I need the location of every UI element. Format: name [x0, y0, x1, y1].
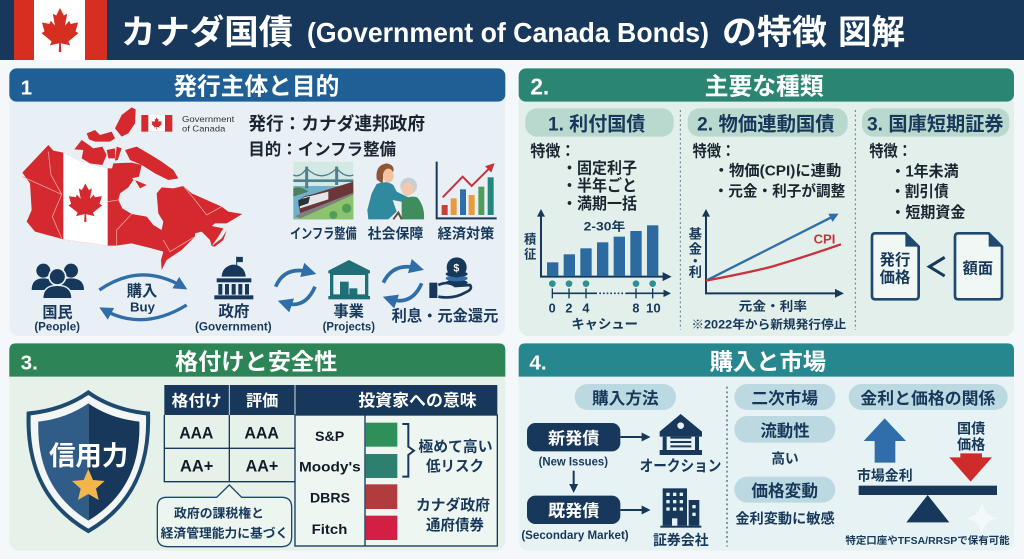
secondary market heading [734, 384, 835, 410]
type 3 heading: 3. 国庫短期証券 [867, 114, 1004, 136]
people label: 国民 [42, 305, 73, 322]
table: rating grades: AA+ [246, 457, 279, 476]
icon: government building [214, 257, 253, 299]
arrows: buy flow [99, 275, 187, 320]
price volatility: 価格変動 [751, 482, 818, 501]
panel 3 heading: 格付けと安全性 [175, 348, 337, 374]
table: rating agencies [295, 415, 497, 546]
table: rating agencies: S&P [315, 428, 344, 444]
note: account types: 特定口座やTFSA/RRSPで保有可能 [845, 534, 1010, 547]
type 1 features: ・満期一括 [562, 195, 637, 213]
icon: coins and hand [429, 257, 471, 298]
icon: warehouse [328, 260, 370, 299]
arrow: new issues to secondary [571, 471, 577, 489]
document: issue price: 価格 [880, 269, 911, 287]
type 3 features: ・1年未満 [890, 163, 959, 181]
table: rating agencies: カナダ政府 [416, 496, 490, 514]
people label [34, 305, 80, 334]
title text: カナダ国債 [121, 13, 293, 52]
document: issue price [872, 233, 919, 299]
sparkle [966, 502, 998, 534]
title text: (Government of Canada Bonds) [307, 17, 709, 48]
purpose labels: インフラ整備 [290, 225, 357, 241]
purchase methods [521, 384, 721, 548]
people label: (People) [34, 320, 80, 334]
document: issue price: 発行 [880, 251, 910, 269]
secondary market box: 既発債 [548, 502, 600, 521]
buy label: 購入 [127, 282, 157, 300]
type 1 features: ・固定利子 [562, 159, 637, 177]
panel 3 heading [9, 343, 505, 377]
price volatility [734, 477, 835, 526]
new issues label: (New Issues) [539, 455, 608, 468]
arrows: projects to repayment cycle [383, 267, 422, 301]
market rate label: 市場金利 [857, 468, 913, 484]
panel 1 heading: 発行主体と目的 [173, 73, 339, 100]
new issues box [527, 423, 620, 451]
Government of Canada logo [141, 114, 235, 133]
purpose labels [290, 225, 494, 241]
icon: people [32, 264, 84, 299]
title text: の特徴 [722, 14, 827, 52]
type 3 features [869, 142, 966, 221]
projects label [323, 303, 375, 334]
type 1 heading [525, 108, 674, 137]
line chart: CPI linked: 元金・利率 [739, 299, 807, 314]
issuer and purpose text [248, 113, 425, 159]
line chart: CPI linked: CPI [814, 232, 835, 246]
icon: coins and hand: $ [453, 263, 459, 275]
document: face value: 額面 [963, 259, 993, 277]
panel 1 heading [9, 68, 505, 102]
arrow: new issues to auction [620, 434, 647, 440]
type 2: inflation-linked bonds [688, 108, 848, 332]
table: rating grades [164, 385, 497, 482]
new issues box: 新発債 [548, 429, 600, 448]
government label: (Government) [195, 320, 272, 334]
arrow: bond price down [949, 453, 992, 482]
panel 2 heading: 2. [530, 73, 549, 99]
line chart: CPI linked: 金 [689, 241, 703, 257]
icon: economic chart [437, 162, 497, 218]
panel 2: main types [519, 68, 1014, 336]
panel 3: ratings and safety [9, 343, 505, 551]
table: rating grades: AAA [244, 423, 279, 442]
table: rating agencies: Moody's [299, 459, 361, 475]
type 3: treasury bills [862, 108, 1009, 299]
panel 1 heading: 1 [21, 76, 32, 99]
table: rating agencies: Fitch [312, 521, 347, 537]
title banner [0, 0, 1024, 60]
line chart: CPI linked: 利 [689, 265, 702, 280]
icon: Canadian flag [14, 0, 107, 60]
table: rating grades: 評価 [246, 392, 278, 410]
timeline: cash flow: 8 [632, 302, 639, 316]
document: face value [955, 233, 1002, 299]
relationship heading [849, 384, 1008, 410]
purpose labels: 社会保障 [368, 225, 423, 241]
shield: creditworthiness: 信用力 [49, 441, 128, 471]
icon: auction bank [660, 414, 702, 455]
bond price label: 価格 [957, 436, 985, 452]
panel 2 heading [519, 68, 1014, 102]
title text: 図解 [838, 14, 905, 52]
purchase methods heading: 購入方法 [592, 388, 659, 408]
purchase methods heading [575, 384, 676, 410]
type 1 features [530, 142, 637, 213]
type 2 features: ・物価(CPI)に連動 [714, 162, 841, 180]
callout: basis of rating: 経済管理能力に基づく [161, 525, 288, 540]
timeline: cash flow: 10 [646, 302, 661, 316]
type 3 features: 特徴： [869, 142, 912, 161]
icon: nurse and elderly person [367, 163, 424, 219]
timeline: cash flow: キャシュー [571, 316, 638, 331]
shield: creditworthiness [27, 390, 150, 533]
type 2 features [693, 142, 846, 200]
map of Canada with flag pattern [22, 107, 242, 270]
table: rating grades: AAA [179, 423, 213, 442]
line chart: CPI linked [689, 209, 841, 314]
icon: bridge and train [293, 162, 353, 219]
relationship heading: 金利と価格の関係 [860, 388, 996, 408]
table: rating grades: AA+ [180, 457, 214, 476]
type 2 heading [688, 108, 848, 137]
auction label: オークション [640, 458, 721, 475]
table: rating agencies: 通府債券 [426, 516, 484, 534]
type 3 features: ・割引債 [890, 183, 949, 201]
price volatility: 金利変動に敏感 [735, 510, 835, 526]
bond price label: 国債 [957, 420, 985, 436]
panel 3 heading: 3. [21, 351, 38, 374]
issuer and purpose text: 目的：インフラ整備 [248, 140, 396, 159]
arrow: market rate up [864, 418, 906, 463]
table: rating agencies: DBRS [310, 490, 350, 506]
type 2 features: ・元金・利子が調整 [714, 182, 846, 200]
timeline: cash flow: 0 [549, 302, 556, 316]
Government of Canada logo: Government [182, 114, 235, 124]
icon: office building [660, 488, 701, 528]
liquidity: 流動性 [760, 422, 810, 441]
panel 4 heading: 4. [529, 351, 547, 374]
liquidity [734, 416, 835, 466]
projects label: (Projects) [323, 320, 375, 334]
bar chart: coupon bond: 積 [524, 231, 537, 246]
panel 2 heading: 主要な種類 [705, 73, 824, 100]
type 1 features: 特徴： [530, 142, 575, 161]
line chart: CPI linked: ・ [689, 253, 702, 268]
secondary market heading: 二次市場 [751, 388, 818, 408]
liquidity: 高い [771, 450, 799, 466]
bar chart: coupon bond: 2-30年 [584, 219, 625, 234]
less-than symbol [929, 257, 945, 276]
type 1 heading: 1. 利付国債 [548, 114, 645, 136]
panel 4: purchase and market [519, 343, 1014, 551]
type 1 features: ・半年ごと [562, 176, 637, 195]
seesaw [859, 486, 997, 522]
type 1: interest-bearing bonds [524, 108, 674, 331]
table: rating agencies: 極めて高い [418, 439, 493, 456]
interest and principal repayment label: 利息・元金還元 [392, 307, 498, 325]
buy label [127, 282, 157, 315]
bar chart: coupon bond: 征 [524, 247, 536, 262]
callout: basis of rating: 政府の課税権と [174, 506, 264, 521]
panel 1: issuer and purpose [9, 68, 505, 336]
timeline: cash flow: 4 [582, 302, 589, 316]
table: rating agencies: 低リスク [426, 458, 484, 475]
secondary market column [734, 384, 835, 526]
table: rating grades: 投資家への意味 [358, 390, 477, 410]
secondary market box [527, 496, 620, 524]
arrow: secondary to securities company [620, 507, 647, 513]
type 3 heading [862, 108, 1009, 137]
callout: basis of rating [157, 485, 292, 547]
issuer and purpose text: 発行：カナダ連邦政府 [248, 113, 425, 134]
government label: 政府 [218, 304, 249, 321]
buy label: Buy [130, 300, 156, 315]
purpose labels: 経済対策 [438, 225, 494, 241]
projects label: 事業 [333, 303, 364, 321]
type 3 features: ・短期資金 [890, 203, 966, 221]
table: rating grades: 格付け [172, 392, 222, 410]
arrows: government to projects cycle [276, 270, 315, 304]
securities company label: 証券会社 [653, 532, 709, 548]
note: issuance stopped in 2022: ※2022年から新規発行停止 [691, 317, 846, 332]
Government of Canada logo: of Canada [182, 123, 226, 133]
timeline: cash flow: 2 [565, 302, 572, 316]
secondary market label: (Secondary Market) [521, 529, 629, 542]
bar chart: coupon bond [524, 209, 668, 277]
line chart: CPI linked: 基 [689, 225, 703, 241]
type 2 features: 特徴： [693, 142, 735, 161]
government label [195, 304, 272, 334]
title text [121, 13, 905, 52]
type 2 heading: 2. 物価連動国債 [697, 114, 835, 136]
timeline: cash flow [549, 280, 668, 331]
bond price label [957, 420, 985, 452]
panel 4 heading [519, 343, 1014, 377]
panel 4 heading: 購入と市場 [710, 348, 826, 374]
rate and price relationship [845, 384, 1010, 547]
